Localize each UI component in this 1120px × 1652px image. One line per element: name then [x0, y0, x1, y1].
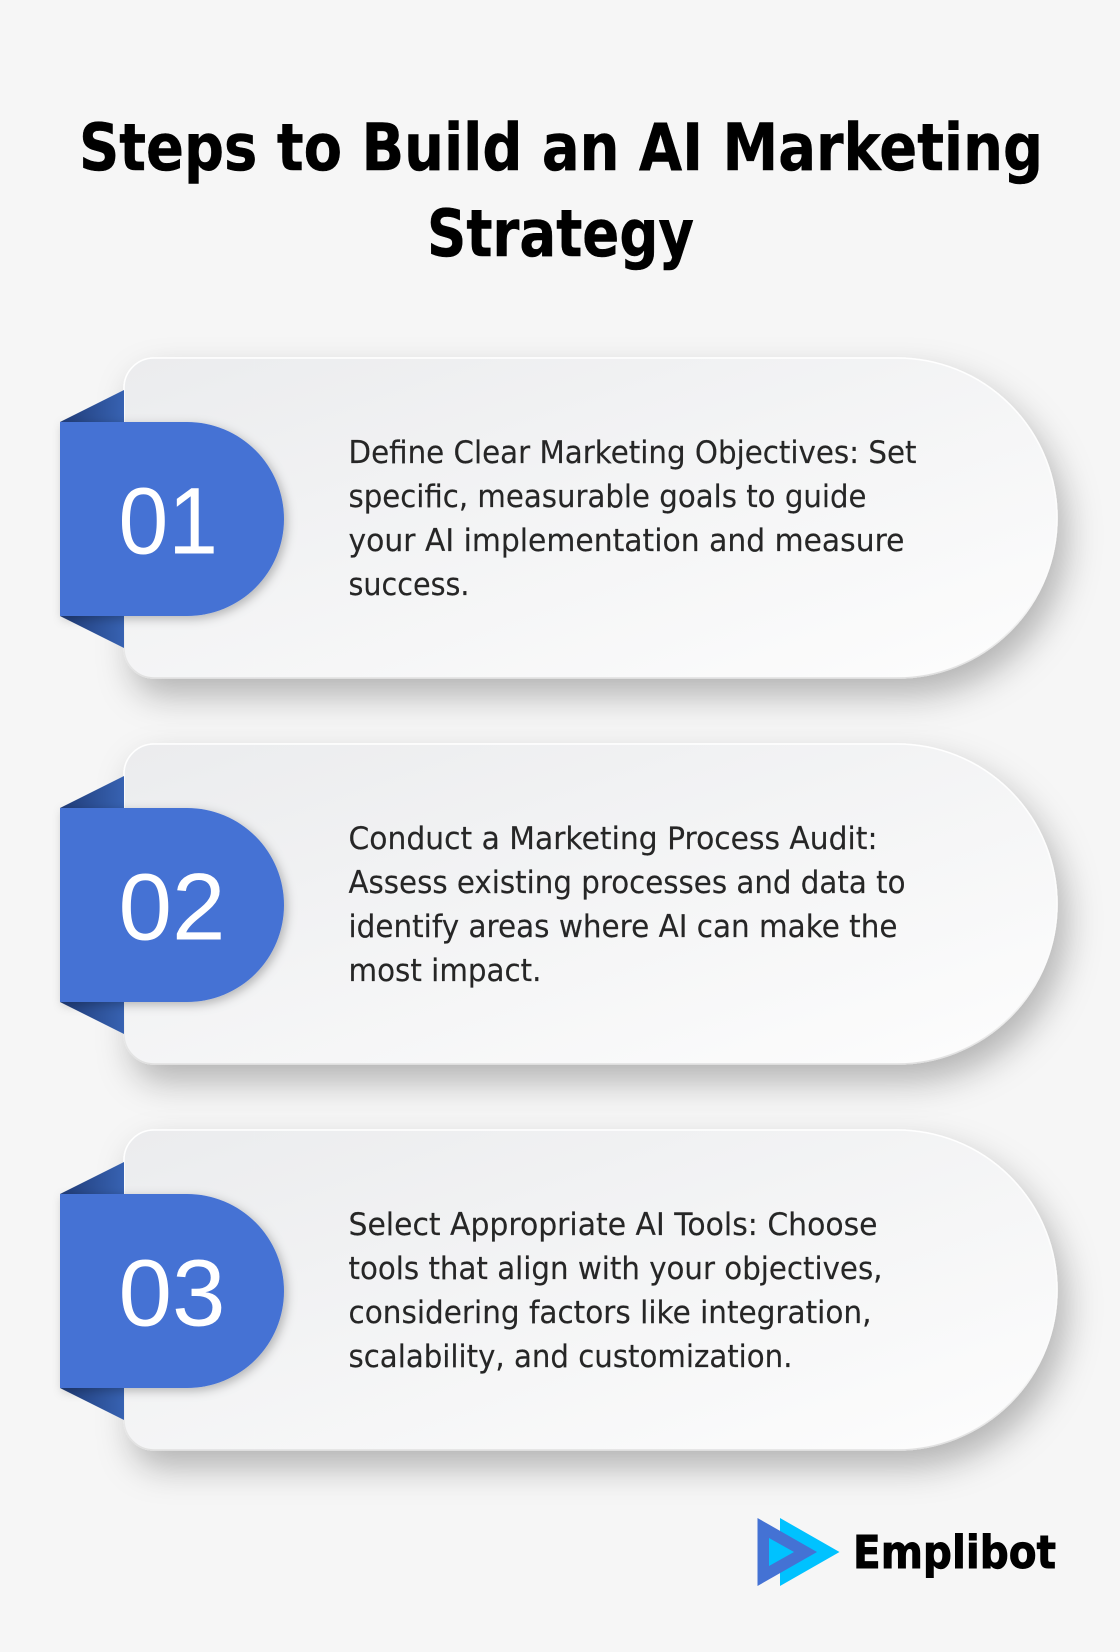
card 03	[124, 1130, 1057, 1450]
number badge 01	[60, 422, 284, 616]
number 03: 03	[118, 1240, 226, 1346]
card 02	[124, 744, 1057, 1064]
wordmark: Emplibot	[853, 1526, 1056, 1579]
text 02: Conduct a Marketing Process Audit:	[348, 821, 878, 857]
panel: step 02	[60, 744, 1057, 1064]
text 02: Assess existing processes and data to	[348, 865, 906, 901]
ribbon folds 02	[60, 776, 124, 1034]
ribbon folds 03	[60, 1162, 124, 1420]
text 02: identify areas where AI can make the	[348, 909, 898, 945]
text 01: Define Clear Marketing Objectives: Set	[348, 435, 916, 471]
number 01: 01	[118, 468, 218, 574]
number 02: 02	[118, 854, 226, 960]
panel: step 03	[60, 1130, 1057, 1450]
text 03: scalability, and customization.	[348, 1339, 792, 1375]
text 03	[348, 1207, 882, 1375]
text 02: most impact.	[348, 953, 542, 989]
card 01	[124, 358, 1057, 678]
text 01: your AI implementation and measure	[348, 523, 904, 559]
title: Strategy	[427, 197, 694, 272]
ribbon folds 01	[60, 390, 124, 648]
logo: Emplibot	[758, 1518, 1056, 1586]
text 03: considering factors like integration,	[348, 1295, 872, 1331]
text 01: success.	[348, 567, 470, 603]
title	[79, 111, 1043, 272]
icon: play triangles	[758, 1518, 840, 1586]
text 02	[348, 821, 906, 989]
number badge 03	[60, 1194, 284, 1388]
text 01	[348, 435, 916, 603]
text 03: tools that align with your objectives,	[348, 1251, 882, 1287]
text 01: specific, measurable goals to guide	[348, 479, 866, 515]
text 03: Select Appropriate AI Tools: Choose	[348, 1207, 878, 1243]
panel: step 01	[60, 358, 1057, 678]
number badge 02	[60, 808, 284, 1002]
